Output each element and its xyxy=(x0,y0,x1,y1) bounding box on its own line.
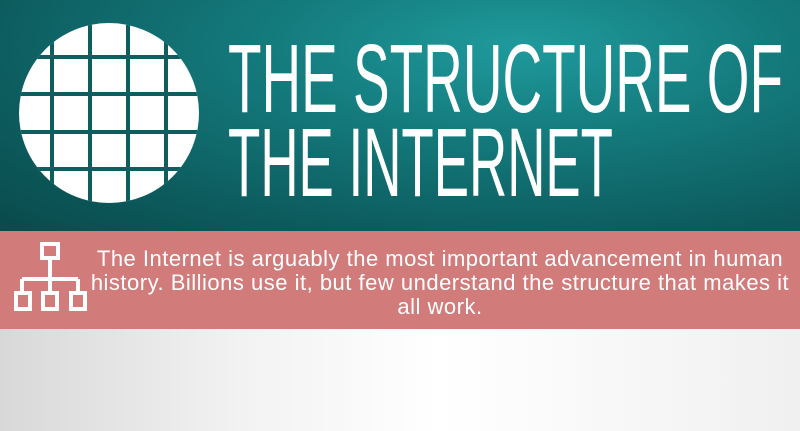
footer gradient xyxy=(0,329,800,431)
title xyxy=(228,24,783,217)
intro text: The Internet is arguably the most important advancement in human xyxy=(97,246,783,271)
intro band xyxy=(0,231,800,329)
intro text: history. Billions use it, but few understand the structure that makes it xyxy=(91,270,789,295)
header panel xyxy=(0,0,800,231)
icon: hierarchy xyxy=(14,242,87,311)
intro text: all work. xyxy=(397,294,483,319)
intro text xyxy=(91,246,789,319)
icon: globe grid xyxy=(19,23,199,203)
